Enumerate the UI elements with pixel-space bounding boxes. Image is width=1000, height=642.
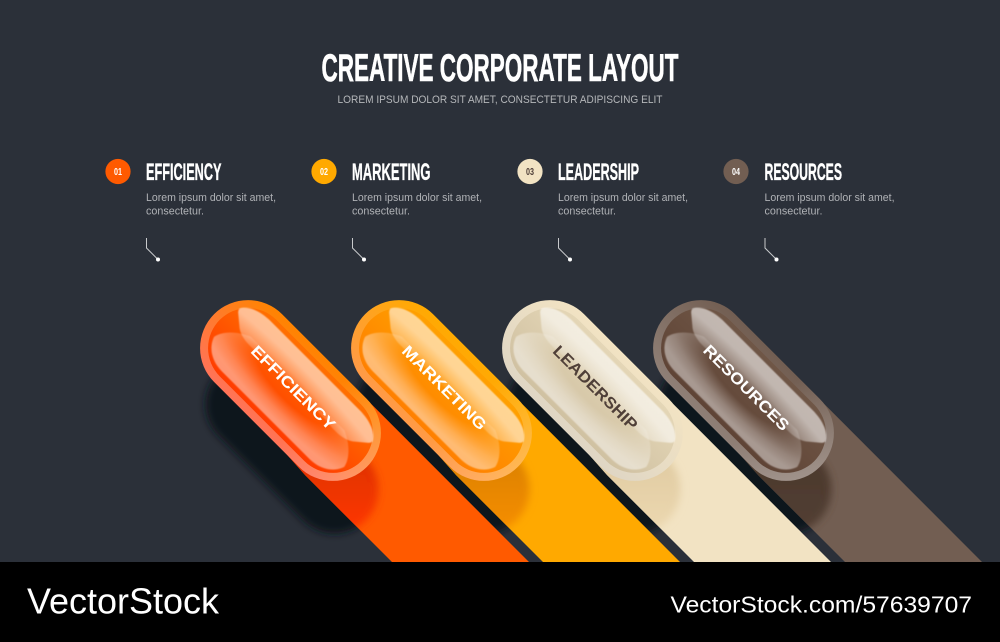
description: Lorem ipsum dolor sit amet, [558,192,688,204]
panel: marketing header [311,159,482,262]
description [352,192,482,218]
description: Lorem ipsum dolor sit amet, [352,192,482,204]
description [764,192,894,218]
heading: resources: RESOURCES [764,160,842,186]
heading: marketing: MARKETING [352,160,430,186]
number badge 03 [517,159,543,184]
shadow on marketing strip [438,456,532,530]
capsule label: efficiency: EFFICIENCY [247,343,338,434]
description: consectetur. [764,206,822,218]
shadow on efficiency strip [288,456,381,530]
diagonal strip: marketing [430,378,680,562]
heading: efficiency: EFFICIENCY [146,160,222,186]
description: consectetur. [352,206,410,218]
title: CREATIVE CORPORATE LAYOUT [322,47,679,90]
capsule: leadership [482,280,703,501]
capsule: efficiency [180,280,401,501]
number badge 01: 01 [114,167,122,178]
footer logo text: VectorStock [27,581,220,622]
description [146,192,276,218]
capsule drop shadows on background [187,342,850,552]
shadow on leadership strip [590,456,682,530]
number badge 02 [311,159,337,184]
footer url: VectorStock.com/57639707 [670,591,972,617]
panel: leadership header [517,159,688,262]
number badge 01 [105,159,131,184]
connector [146,238,160,262]
capsule: marketing [331,280,552,501]
panel: resources header [723,159,894,262]
number badge 03: 03 [526,167,534,178]
diagonal strip: efficiency [278,378,529,562]
capsule label: marketing: MARKETING [398,343,489,434]
footer bar [0,562,1000,642]
connector [558,238,572,262]
connector [765,238,778,262]
number badge 04: 04 [732,167,740,178]
description: Lorem ipsum dolor sit amet, [146,192,276,204]
description [558,192,688,218]
shadow on resources strip [744,459,834,528]
number badge 02: 02 [320,167,328,178]
capsule label: resources: RESOURCES [699,342,792,435]
description: Lorem ipsum dolor sit amet, [764,192,894,204]
heading: leadership: LEADERSHIP [558,160,639,186]
number badge 04 [723,159,749,184]
diagonal strip: resources [732,378,982,562]
description: consectetur. [558,206,616,218]
connector [352,238,366,262]
diagonal strip: leadership [580,378,831,562]
description: consectetur. [146,206,204,218]
panel: efficiency header [105,159,276,262]
capsule label: leadership: LEADERSHIP [549,343,640,434]
subtitle: LOREM IPSUM DOLOR SIT AMET, CONSECTETUR ADIPISCING ELIT [338,94,663,106]
capsule: resources [633,280,854,501]
